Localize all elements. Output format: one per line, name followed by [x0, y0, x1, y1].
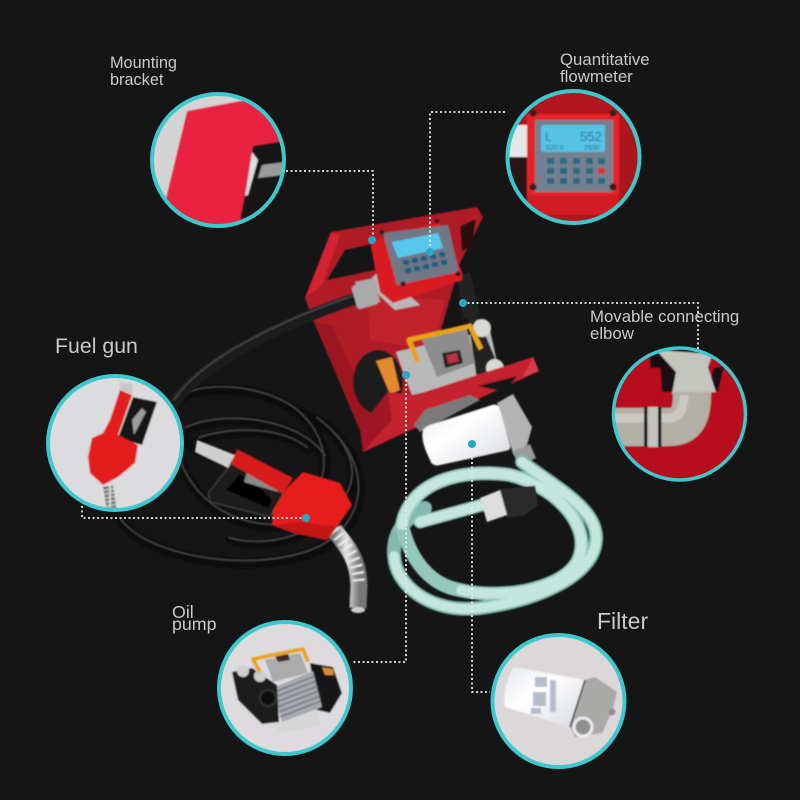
hose end strainer — [480, 486, 538, 522]
callout: quantitative flowmeter — [505, 90, 645, 228]
label: movable connecting elbow: elbow — [590, 324, 635, 343]
pump unit — [172, 207, 539, 466]
label: quantitative flowmeter: Quantitative — [560, 50, 650, 69]
label: fuel gun: Fuel gun — [55, 334, 138, 358]
hose coupling — [351, 280, 379, 310]
label: movable connecting elbow: Movable connecting — [590, 307, 739, 326]
callout: quantitative flowmeter: 520 0 — [546, 145, 564, 152]
main hose to meter — [172, 298, 358, 405]
fuel filter — [422, 394, 536, 466]
front plate — [360, 357, 539, 452]
callout: quantitative flowmeter: 2930 — [584, 145, 600, 152]
fuel nozzle — [195, 440, 365, 613]
callout: fuel gun — [46, 375, 184, 513]
label: mounting bracket: bracket — [110, 71, 164, 89]
flowmeter display text: L — [545, 130, 552, 144]
callout: oil pump — [218, 620, 354, 756]
label: filter: Filter — [597, 608, 648, 634]
flowmeter — [355, 218, 462, 310]
callout: filter — [490, 633, 628, 771]
black fuel hose coil — [121, 387, 359, 563]
callout: quantitative flowmeter: 552 — [580, 129, 602, 144]
label: mounting bracket: Mounting — [110, 54, 177, 72]
callout: movable connecting elbow — [610, 345, 750, 485]
leader lines — [82, 112, 698, 692]
mounting plate — [305, 207, 483, 430]
main hose highlight — [174, 294, 358, 400]
label: quantitative flowmeter: flowmeter — [560, 67, 633, 86]
label: oil pump: pump — [172, 614, 217, 634]
callout dots — [302, 236, 476, 522]
clear suction hose — [394, 462, 596, 609]
label: oil pump: Oil — [172, 602, 194, 622]
motor and pump head — [353, 272, 504, 414]
callout: mounting bracket — [150, 92, 290, 228]
